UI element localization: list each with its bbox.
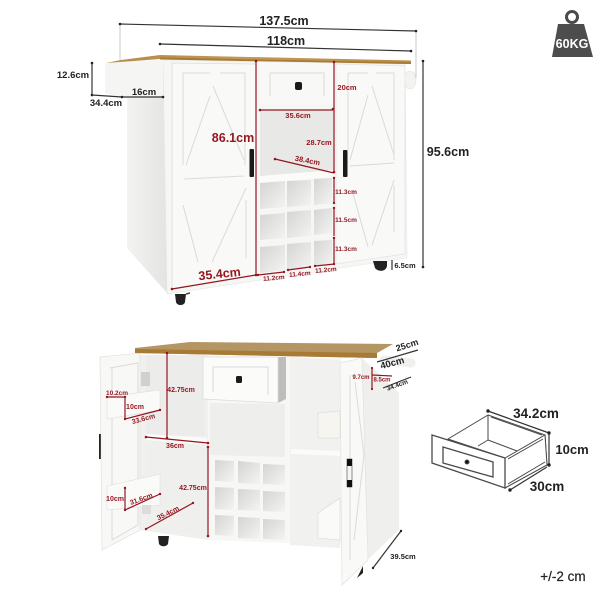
dimension: wine rack heights: 11.3cm [335, 189, 357, 196]
left caster [175, 293, 190, 305]
dimension: 35.6cm shelf width [259, 108, 334, 120]
wooden counter top [135, 342, 393, 358]
left shelf board [146, 434, 207, 445]
shelf board [260, 170, 334, 183]
dimension: 30cm [508, 467, 564, 494]
icon: 60KG weight: 60KG [556, 37, 588, 51]
dimension: 9.7cm: 9.7cm [352, 375, 370, 381]
dimension: 34.4cm: 34.4cm [386, 378, 409, 393]
dimension: 8.5cm [372, 375, 392, 384]
dimension: 35.4cm door width: 35.4cm [198, 265, 241, 283]
right barn door [336, 64, 405, 264]
central unit [208, 355, 342, 545]
dimension: 86.1cm door height: 86.1cm [212, 131, 254, 145]
dimension: wine rack heights: 11.3cm [335, 246, 357, 253]
dimension: 38.4cm shelf depth [274, 154, 334, 173]
dimension: 34.2cm: 34.2cm [513, 406, 559, 421]
dimension: 25cm [377, 337, 420, 362]
dimension: wine rack widths [257, 264, 337, 283]
dimension: 25cm: 25cm [395, 337, 420, 353]
dimension: 30cm: 30cm [530, 479, 564, 494]
open left door [99, 353, 140, 550]
right compartment [290, 357, 340, 548]
dimension: upper 42.75cm [166, 352, 195, 439]
dimension: 31.6cm: 31.6cm [129, 492, 154, 507]
dimension: 33.6cm [124, 409, 161, 426]
right shelf board [291, 449, 340, 456]
hinge upper [141, 372, 150, 386]
towel bar [404, 71, 416, 89]
dimension: 35.4cm depth [145, 502, 194, 530]
dimension: 40cm: 40cm [379, 355, 406, 372]
tolerance note: +/-2 cm [540, 569, 586, 584]
dimension: upper basket 10cm [125, 397, 144, 419]
panel: open view of kitchen island [99, 342, 411, 585]
caster right [357, 566, 363, 578]
dimension: lower basket 10cm [106, 487, 126, 511]
left door upper basket [107, 390, 160, 419]
towel bar [384, 360, 411, 363]
dimension: 36cm shelf [145, 436, 209, 450]
dimension: 6.5cm caster: 6.5cm [394, 261, 416, 270]
right door handle [347, 459, 352, 487]
wine rack [260, 178, 332, 273]
dimension: upper 42.75cm: 42.75cm [167, 387, 195, 394]
right caster [373, 261, 387, 271]
open shelf [260, 110, 334, 180]
dimension: 16cm [121, 87, 164, 98]
cabinet front body [163, 60, 407, 294]
dimension: 34.2cm [486, 406, 559, 435]
panel: front view of kitchen island [105, 55, 416, 305]
dimension: lower 42.75cm [179, 446, 209, 537]
dimension: 118cm counter width: 118cm [267, 34, 305, 48]
dimension: 35.6cm shelf width: 35.6cm [285, 111, 311, 120]
right door handle [343, 150, 348, 177]
dimension: upper basket 10cm: 10cm [126, 404, 144, 411]
dimension: 12.6cm thickness [57, 62, 93, 96]
wine rack [215, 460, 285, 540]
left door lower basket [107, 474, 160, 510]
dimension: 20cm and 28.7cm right rail: 20cm [337, 83, 357, 92]
right door outer side [362, 358, 399, 565]
interior back wall [140, 355, 208, 540]
right door lower basket [318, 498, 340, 540]
hinge lower [142, 505, 151, 514]
dimension: 33.6cm: 33.6cm [131, 413, 156, 426]
dimension: 35.4cm door width [171, 265, 257, 290]
right door upper basket [318, 411, 340, 438]
open right door [340, 358, 368, 585]
dimension: 137.5cm overall width: 137.5cm [259, 14, 309, 28]
dimension: 9.7cm [352, 367, 373, 390]
dimension: 12.6cm thickness: 12.6cm [57, 70, 89, 81]
dimension: 39.5cm [372, 530, 416, 569]
dimension: 10.2cm: 10.2cm [106, 390, 128, 397]
dimension: 39.5cm: 39.5cm [390, 552, 416, 561]
wooden counter top [106, 55, 411, 64]
upper left compartment [146, 355, 205, 436]
left door handle [250, 149, 254, 177]
dimension: wine rack widths: 11.4cm [289, 270, 311, 279]
dimension: wine rack widths: 11.2cm [315, 266, 337, 275]
dimension: wine rack heights [333, 177, 357, 265]
dimension: wine rack heights: 11.5cm [335, 217, 357, 224]
dimension: 31.6cm [125, 492, 161, 510]
central open shelf [210, 403, 285, 457]
dimension: 38.4cm shelf depth: 38.4cm [294, 154, 321, 167]
dimension: 8.5cm: 8.5cm [373, 378, 391, 384]
dimension: 16cm: 16cm [132, 87, 156, 98]
caster left [158, 536, 169, 546]
dimension: 36cm shelf: 36cm [166, 443, 184, 450]
dimension: lower basket 10cm: 10cm [106, 496, 124, 503]
dimension: wine rack widths: 11.2cm [263, 274, 285, 283]
centre drawer [260, 63, 334, 104]
dimension: lower 42.75cm: 42.75cm [179, 485, 207, 492]
dimension: 35.4cm depth: 35.4cm [156, 505, 180, 522]
lower left compartment [146, 440, 207, 535]
dimension: 95.6cm total height: 95.6cm [427, 145, 469, 159]
dimension: 118cm counter width [159, 34, 412, 52]
dimension: 137.5cm overall width [119, 14, 417, 78]
drawer pulled out [203, 357, 286, 403]
icon: drawer diagram [432, 415, 547, 488]
left barn door [172, 63, 256, 289]
dimension: 10cm: 10cm [555, 442, 589, 457]
dimension: 20cm and 28.7cm right rail [306, 61, 357, 173]
drop leaf bracket [105, 60, 163, 97]
dimension: 10cm [547, 433, 589, 467]
dimension: 20cm and 28.7cm right rail: 28.7cm [306, 138, 332, 147]
cabinet side panel [127, 62, 167, 293]
dimension: 34.4cm: 34.4cm [90, 98, 122, 109]
icon: 60KG weight [552, 12, 593, 57]
